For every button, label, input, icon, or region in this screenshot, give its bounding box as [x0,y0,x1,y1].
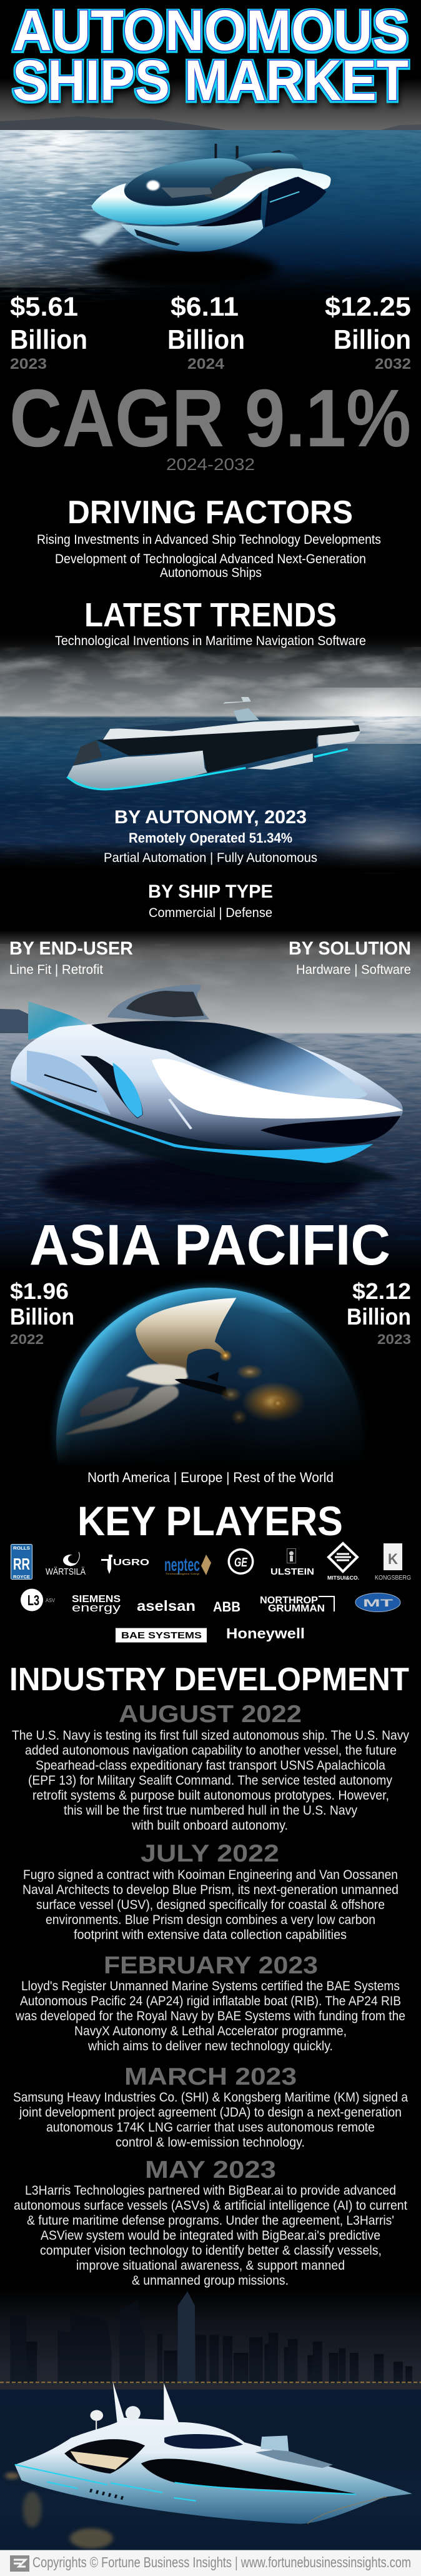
development: march 2023 [13,2063,408,2150]
stat: 2032 value: $12.25 [325,292,411,322]
development: july 2022: surface vessel (USV), designed specifically for coastal & offshore [36,1898,385,1912]
development: july 2022: Fugro signed a contract with Kooiman Engineering and Van Oossanen [23,1868,398,1882]
logo: Honeywell: Honeywell [226,1625,305,1641]
logo: Rolls-Royce: RR [13,1555,30,1573]
logo: Siemens Energy [72,1594,121,1614]
logo: Kongsberg: KONGSBERG [375,1575,411,1581]
development: august 2022: retrofit systems & purpose built autonomous prototypes. However, [32,1788,389,1803]
region heading: asia pacific: ASIA PACIFIC [29,1213,390,1277]
stat: 2024 value: Billion [167,324,245,355]
regional stat: 2023: 2023 [377,1331,411,1347]
stat: 2024 value: $6.11 [171,292,239,322]
panel: latest trends ship photo [0,631,421,875]
logo: Ulstein: ULSTEIN [270,1566,314,1577]
icon: white yacht with neon trim [5,2382,412,2548]
stat: 2023 value: Billion [10,324,87,355]
logo: Fugro: UGRO [113,1557,149,1568]
regional stat: 2022: $1.96 [10,1278,69,1304]
segment: by ship type [148,881,273,920]
logo: Ulstein [270,1549,314,1577]
panel: speedboat photo [0,930,421,1271]
segment: by solution [289,938,411,977]
stat: 2024 value [167,292,245,373]
regional stat: 2022 [10,1278,74,1347]
segment: by solution: Hardware | Software [296,963,411,977]
logo: Kongsberg [375,1543,411,1581]
latest trends: LATEST TRENDS [84,596,337,634]
icon: futuristic glass-domed yacht [78,144,331,289]
icon: Fortune Business Insights logo [10,2555,29,2572]
development: february 2023: NavyX Autonomy & Lethal Accelerator programme, [74,2024,347,2038]
development: may 2023: computer vision technology to identify better & classify vessels, [40,2243,382,2258]
segment: by autonomy [104,807,317,865]
stat: 2032 value: Billion [334,324,411,355]
development: august 2022: added autonomous navigation capability to another vessel, the future [25,1743,397,1758]
footer band [0,2550,421,2576]
stat: 2032 value: 2032 [375,356,411,373]
regional stat: 2023: $2.12 [352,1278,411,1304]
logo: Mitsui [327,1543,359,1581]
icon: catamaran ferry with neon waterline [67,697,360,790]
logo: Aselsan: aselsan [137,1598,196,1614]
icon: earth continents and city lights [64,1298,306,1435]
stat: 2023 value [10,292,87,373]
driving factors [37,494,381,580]
development: august 2022 [12,1701,409,1833]
panel: hero ship photo [0,81,421,301]
development: march 2023: control & low-emission technology. [116,2135,305,2150]
CAGR callout: 2024-2032 [166,455,255,474]
logo: ABB: ABB [213,1599,240,1615]
logo: BAE Systems [116,1628,207,1643]
development: february 2023 [15,1952,405,2053]
key player logos [11,1543,411,1643]
development: march 2023: joint development project agreement (JDA) to design a next-generation [19,2105,402,2120]
logo: Neptec: neptec [164,1555,200,1575]
development: august 2022: this will be the first true numbered hull in the U.S. Navy [64,1803,357,1818]
logo: Mitsui: MITSUI&CO. [327,1575,359,1581]
stat: 2023 value: 2023 [10,356,47,373]
logo: Rolls-Royce: ROLLS [13,1546,30,1551]
development: may 2023: L3Harris Technologies partnered with BigBear.ai to provide advanced [25,2183,396,2198]
development: july 2022: JULY 2022 [141,1840,279,1867]
segment: by ship type: Commercial | Defense [149,906,272,920]
development: march 2023: MARCH 2023 [124,2063,297,2090]
segment: by autonomy: Remotely Operated 51.34% [129,830,292,846]
development: may 2023 [14,2157,407,2288]
development: may 2023: improve situational awareness, & support manned [76,2258,345,2273]
regional stat: 2023: Billion [347,1304,411,1330]
logo: Neptec: Technologies Corp [166,1572,200,1575]
development: august 2022: AUGUST 2022 [119,1701,302,1728]
logo: Northrop Grumman [260,1595,334,1614]
development: february 2023: FEBRUARY 2023 [104,1952,318,1979]
development: may 2023: & unmanned group missions. [132,2273,289,2288]
regional stat: 2022: Billion [10,1304,74,1330]
industry development heading: INDUSTRY DEVELOPMENT [9,1661,409,1698]
title [12,0,409,113]
logo: BAE Systems: BAE SYSTEMS [121,1630,202,1641]
segment: by autonomy: Partial Automation | Fully Autonomous [104,851,317,865]
segment: by end-user: Line Fit | Retrofit [9,963,103,977]
development: july 2022: Naval Architects to develop Blue Prism, its next-generation unmanned [22,1883,399,1897]
driving factors: Rising Investments in Advanced Ship Technology Developments [37,533,381,547]
segment: by end-user [9,938,133,977]
logo: L3 ASV: ASV [46,1598,56,1603]
panel: night city yacht photo [0,2288,421,2550]
logo: GE [227,1548,254,1575]
development: march 2023: autonomous 174K LNG carrier that uses autonomous remote [46,2120,375,2135]
development: may 2023: ASView system would be integrated with BigBear.ai's predictive [41,2228,380,2243]
development: august 2022: (EPF 13) for Military Sealift Command. The service tested autonomy [28,1773,392,1788]
development: may 2023: MAY 2023 [145,2157,276,2183]
logo: Wartsila [46,1552,86,1577]
logo: GE: GE [234,1556,247,1570]
development: july 2022 [22,1840,399,1942]
logo: Siemens Energy: energy [72,1601,121,1614]
driving factors: DRIVING FACTORS [67,494,353,531]
development: july 2022: environments. Blue Prism design combines a very low carbon [46,1913,375,1927]
logo: MT oval: MT [363,1597,394,1609]
segment: by autonomy: BY AUTONOMY, 2023 [114,807,307,828]
development: august 2022: with built onboard autonomy. [131,1818,288,1833]
segment: by solution: BY SOLUTION [289,938,411,959]
stat: 2024 value: 2024 [187,356,225,373]
driving factors: Development of Technological Advanced Next-Generation [55,552,366,566]
logo: Siemens Energy: SIEMENS [72,1594,121,1605]
development: august 2022: Spearhead-class expeditionary fast transport USNS Apalachicola [36,1758,385,1773]
regional stat: 2022: 2022 [10,1331,44,1347]
key players heading: KEY PLAYERS [77,1498,343,1544]
market size stats [10,292,411,373]
latest trends [55,596,366,648]
logo: Fugro [101,1555,149,1574]
regional stat: 2023 [347,1278,411,1347]
driving factors: Autonomous Ships [160,566,262,580]
panel: globe photo [51,1280,362,1463]
logo: Northrop Grumman: NORTHROP [260,1595,318,1606]
logo: Northrop Grumman: GRUMMAN [268,1603,325,1614]
logo: Wartsila: WÄRTSILÄ [46,1566,86,1577]
city skyline [0,2292,421,2383]
development: may 2023: & future maritime defense programs. Under the agreement, L3Harris' [27,2213,394,2228]
development: july 2022: footprint with extensive data collection capabilities [74,1928,347,1942]
logo: Kongsberg: K [388,1551,399,1568]
other regions: North America | Europe | Rest of the World [87,1470,334,1485]
logo: Rolls-Royce [11,1544,32,1580]
stat: 2023 value: $5.61 [10,292,78,322]
icon: futuristic speedboat with neon hull [11,985,403,1211]
logo: L3 ASV: L3 [27,1592,39,1608]
stat: 2032 value [325,292,411,373]
logo: Rolls-Royce: ROYCE [13,1575,30,1580]
segment: by ship type: BY SHIP TYPE [148,881,273,902]
development: february 2023: which aims to deliver new technology quickly. [87,2039,333,2053]
segment: by end-user: BY END-USER [9,938,133,959]
logo: L3 ASV [21,1589,56,1611]
logo: MT oval [355,1593,400,1611]
latest trends: Technological Inventions in Maritime Navigation Software [55,634,366,648]
